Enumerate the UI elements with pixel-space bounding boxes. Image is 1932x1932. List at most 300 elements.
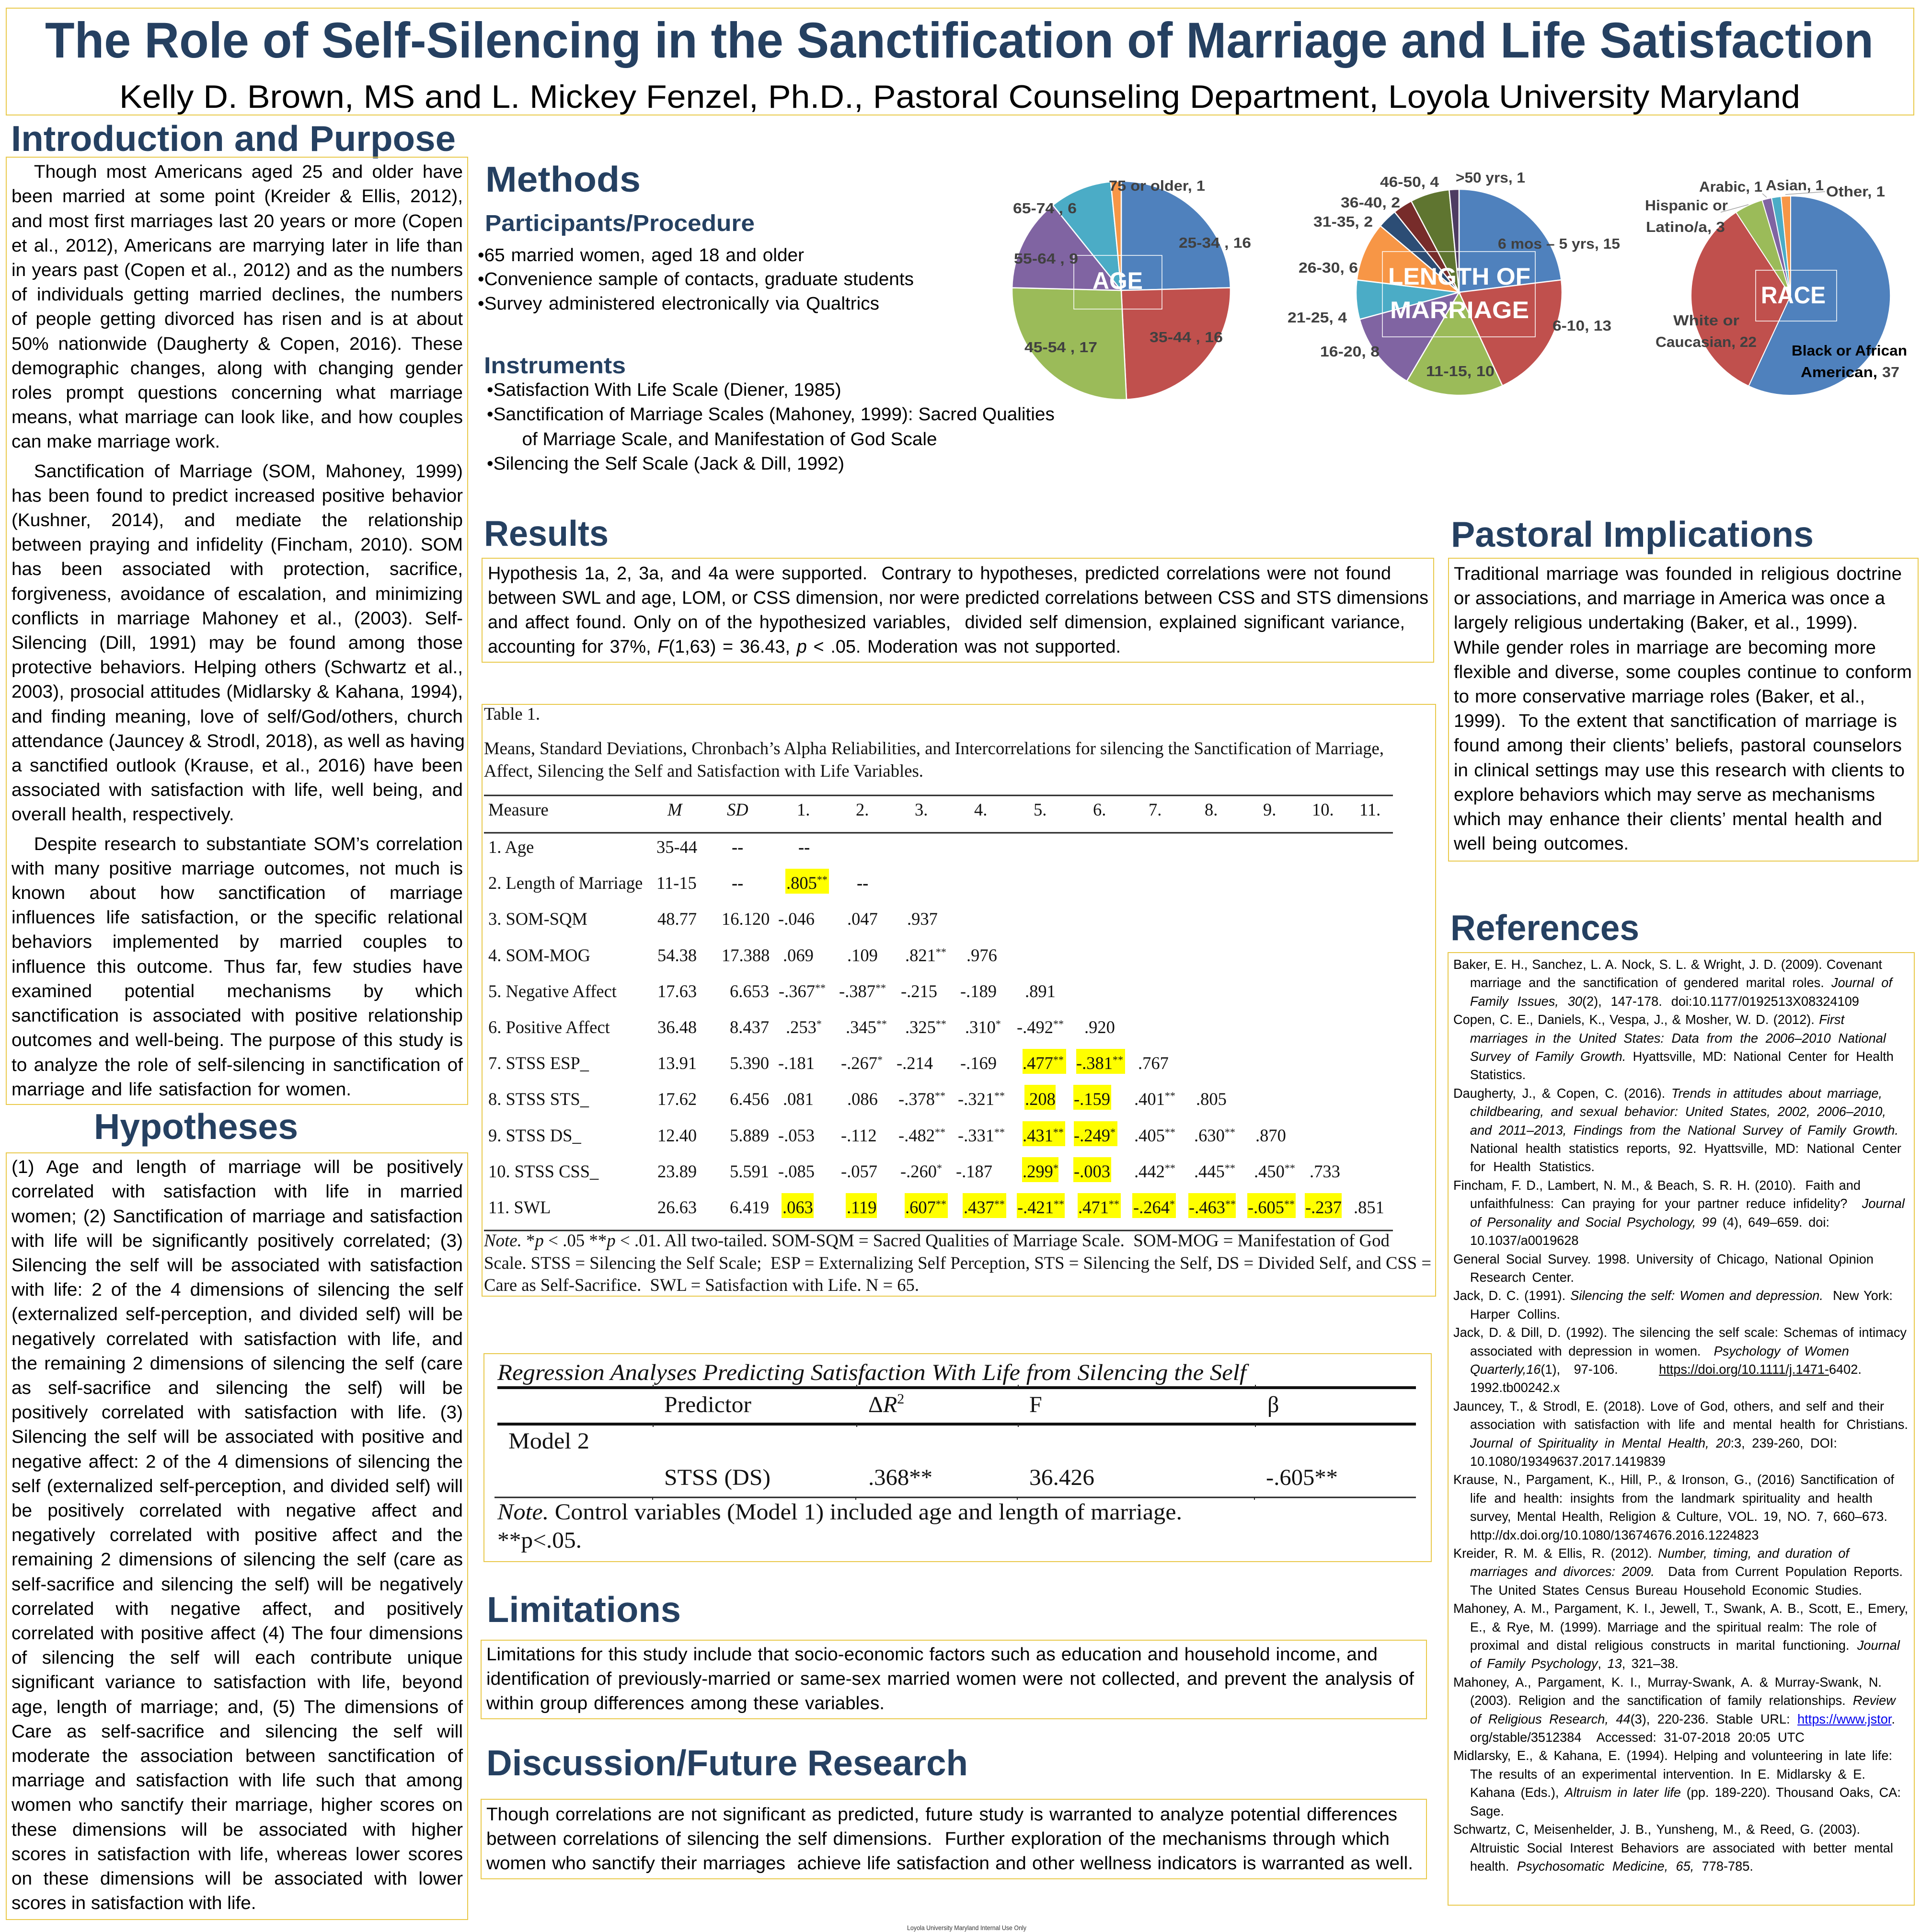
table header row: Measure [488, 800, 549, 819]
table header row: 6. [1093, 800, 1106, 819]
text block: pastoral implications: or associations, and marriage in America was once a [1454, 588, 1885, 609]
row 2: Length of Marriage: .805 [786, 873, 817, 893]
text block: references: Midlarsky, E., & Kahana, E. (1994). Helping and volunteering in late life: [1453, 1748, 1892, 1763]
row 6: Positive Affect: 8.437 [730, 1017, 769, 1037]
row 11: SWL: ** [1054, 1198, 1064, 1210]
text block: pastoral implications: Traditional marriage was founded in religious doctrine [1454, 564, 1902, 584]
regression table: STSS (DS) [664, 1465, 770, 1490]
text block: references: (2003). Religion and the sanctification of family relationships. Review [1470, 1693, 1896, 1708]
table note [483, 1230, 1431, 1295]
text block: results: between SWL and age, LOM, or CSS dimension, nor were predicted correlations between CSS and STS dimensions [488, 588, 1428, 608]
row 4: SOM-MOG: .069 [783, 945, 814, 965]
text block: references: health. Psychosomatic Medicine, 65, 778-785. [1470, 1859, 1753, 1874]
regression table [494, 1360, 1416, 1553]
row 1: Age: 1. Age [488, 837, 534, 857]
row 6: Positive Affect: .345 [846, 1017, 876, 1037]
authors and affiliation: Kelly D. Brown, MS and L. Mickey Fenzel, Ph.D., Pastoral Counseling Department, Loyola University Maryland [119, 79, 1800, 115]
pie chart: length of marriage: 6-10, 13 [1552, 317, 1611, 334]
text block: references: The results of an experimental intervention. In E. Midlarsky & E. [1470, 1767, 1865, 1782]
row 7: STSS ESP: -.181 [778, 1053, 815, 1073]
row 6: Positive Affect: ** [876, 1018, 887, 1030]
row 4: SOM-MOG: .109 [847, 945, 878, 965]
panel border: pastoral implications [1449, 558, 1918, 861]
row 11: SWL: .607 [905, 1197, 936, 1217]
text block: introduction: Sanctification of Marriage (SOM, Mahoney, 1999) [34, 461, 463, 482]
text block: references: association with satisfaction with life and mental health for Christians. [1470, 1417, 1908, 1432]
text block: introduction: Though most Americans aged 25 and older have [34, 162, 463, 182]
row 9: STSS DS: -.331 [958, 1126, 994, 1145]
table header row: 3. [915, 800, 928, 819]
text block: references: childbearing, and sexual behavior: United States, 2002, 2006–2010, [1470, 1104, 1886, 1119]
text block: references: of Religious Research, 44(3), 220-236. Stable URL: https://www.jstor. [1470, 1712, 1895, 1726]
text block: references: The United States Census Bureau Household Economic Studies. [1470, 1583, 1862, 1598]
pie chart: age: 45-54 , 17 [1024, 339, 1097, 356]
text block: references: National health statistics reports, 92. Hyattsville, MD: National Center [1470, 1141, 1901, 1156]
text block: hypotheses: age, length of marriage; and, (5) The dimensions of [12, 1697, 463, 1717]
pie chart: length of marriage: 21-25, 4 [1288, 309, 1347, 326]
text block: introduction: 50% nationwide (Daugherty & Copen, 2016). These [12, 334, 463, 354]
row 4: SOM-MOG: 54.38 [657, 945, 697, 965]
regression table: Model 2 [508, 1428, 589, 1454]
row 10: STSS CSS: -.085 [778, 1162, 815, 1181]
text block: references: 10.1037/a0019628 [1470, 1233, 1578, 1248]
text block: references: Mahoney, A. M., Pargament, K. I., Jewell, T., Swank, A. B., Scott, E., Emery, [1453, 1601, 1908, 1616]
text block: references: Sage. [1470, 1804, 1504, 1818]
text block: introduction: behaviors implemented by married couples to [12, 932, 463, 952]
text block: references: Survey of Family Growth. Hyattsville, MD: National Center for Health [1470, 1049, 1894, 1064]
row 10: STSS CSS: .445 [1194, 1162, 1225, 1181]
pie chart: race: Hispanic or [1645, 197, 1728, 214]
heading: Limitations: Limitations [487, 1589, 681, 1630]
row 10: STSS CSS: .733 [1310, 1162, 1340, 1181]
text block: introduction: forgiveness, avoidance of escalation, and minimizing [12, 584, 463, 604]
pie chart: age: 25-34 , 16 [1179, 234, 1251, 251]
pie chart: length of marriage: MARRIAGE [1390, 297, 1529, 323]
title: The Role of Self-Silencing in the Sanctification of Marriage and Life Satisfaction [45, 12, 1874, 69]
row 6: Positive Affect: 6. Positive Affect [488, 1017, 610, 1037]
pie chart: age: AGE [1092, 267, 1143, 294]
text block: introduction: and finding meaning, love of self/God/others, church [12, 707, 463, 727]
text block: references: Harper Collins. [1470, 1307, 1560, 1322]
text block: references: of Family Psychology, 13, 321–38. [1470, 1656, 1679, 1671]
row 9: STSS DS: 12.40 [657, 1126, 697, 1145]
text block: references: Jauncey, T., & Strodl, E. (2018). Love of God, others, and self and their [1453, 1399, 1884, 1414]
panel border: results [482, 558, 1434, 662]
text block: instruments bullets: •Sanctification of Marriage Scales (Mahoney, 1999): Sacred Qualities [487, 404, 1055, 425]
text block: introduction: overall health, respectively. [12, 805, 234, 825]
row 6: Positive Affect: * [816, 1018, 822, 1030]
row 11: SWL: 26.63 [657, 1197, 697, 1217]
row 9: STSS DS: -.249 [1074, 1126, 1110, 1145]
text block: hypotheses: with life will be significantly positively correlated; (3) [12, 1231, 463, 1251]
text block: instruments bullets [487, 378, 1053, 476]
text block: introduction: 2003), prosocial attitudes (Midlarsky & Kahana, 1994), [12, 682, 463, 702]
subheading: Instruments: Instruments [484, 353, 626, 379]
row 5: Negative Affect: ** [815, 982, 826, 994]
row 8: STSS STS: -.159 [1074, 1089, 1110, 1109]
row 2: Length of Marriage: 2. Length of Marriage [488, 873, 643, 893]
text block: introduction: with many positive marriage outcomes, not much is [12, 859, 463, 879]
row 4: SOM-MOG: 4. SOM-MOG [488, 945, 590, 965]
row 8: STSS STS: 8. STSS STS_ [488, 1089, 589, 1109]
panel border: discussion [481, 1799, 1426, 1879]
pie chart: race: American, [1801, 364, 1877, 380]
row 6: Positive Affect: ** [936, 1018, 946, 1030]
row 4: SOM-MOG: 17.388 [722, 945, 770, 965]
text block: introduction: to analyze the role of self-silencing in sanctification of [12, 1055, 463, 1075]
text block: introduction: Despite research to substantiate SOM’s correlation [34, 834, 463, 854]
pie chart: length of marriage: LENGTH OF [1388, 263, 1530, 290]
table header row: 7. [1149, 800, 1162, 819]
table header row: 4. [974, 800, 987, 819]
row 8: STSS STS: .086 [847, 1089, 878, 1109]
table note: Note. *p < .05 **p < .01. All two-tailed. SOM-SQM = Sacred Qualities of Marriage Scale. SOM-MOG = Manifestation of God [483, 1230, 1390, 1250]
pie chart: race [1645, 177, 1907, 395]
row 7: STSS ESP: 5.390 [730, 1053, 769, 1073]
text block: introduction: in years past (Copen et al., 2012) and as the numbers [12, 260, 463, 280]
table header row: 8. [1205, 800, 1218, 819]
row 5: Negative Affect: ** [875, 982, 886, 994]
row 7: STSS ESP: ** [1053, 1054, 1064, 1066]
correlation table: Affect, Silencing the Self and Satisfaction with Life Variables. [484, 761, 923, 781]
row 7: STSS ESP: .767 [1138, 1053, 1169, 1073]
text block: references: for Health Statistics. [1470, 1159, 1595, 1174]
text block: hypotheses: remaining 2 dimensions of silencing the self (care as [12, 1550, 463, 1570]
text block: hypotheses [12, 1155, 463, 1916]
row 3: SOM-SQM: -.046 [778, 909, 815, 929]
row 11: SWL: -.264 [1133, 1197, 1170, 1217]
text block: instruments bullets: •Satisfaction With Life Scale (Diener, 1985) [487, 380, 841, 400]
text block: hypotheses: these dimensions will be associated with higher [12, 1820, 463, 1840]
row 4: SOM-MOG: .821 [905, 945, 936, 965]
pie chart: age: 55-64 , 9 [1014, 250, 1078, 267]
regression table: 2 [897, 1391, 904, 1407]
row 8: STSS STS: .081 [783, 1089, 814, 1109]
text block: pastoral implications: to more conservative marriage roles (Baker, et al., [1454, 687, 1865, 707]
text block: references: Daugherty, J., & Copen, C. (2016). Trends in attitudes about marriage, [1453, 1086, 1882, 1101]
row 10: STSS CSS: -.260 [900, 1162, 937, 1181]
text block: introduction: sanctification is associated with positive relationship [12, 1006, 463, 1026]
row 10: STSS CSS: ** [1225, 1162, 1235, 1174]
text block: discussion: between correlations of silencing the self dimensions. Further exploration of the mechanisms through which [486, 1829, 1390, 1849]
text block: hypotheses: on these dimensions will be associated with lower [12, 1869, 463, 1889]
text block: references: marriage and the sanctification of gendered marital roles. Journal of [1470, 975, 1892, 990]
text block: references: Journal of Spirituality in Mental Health, 20:3, 239-260, DOI: [1470, 1436, 1837, 1450]
row 10: STSS CSS: .299 [1023, 1162, 1053, 1181]
row 1: Age: -- [798, 837, 810, 857]
row 5: Negative Affect: 6.653 [730, 981, 769, 1001]
row 7: STSS ESP: .477 [1023, 1053, 1053, 1073]
title panel border [6, 8, 1914, 115]
text block: references: Quarterly,16(1), 97-106. https://doi.org/10.1111/j.1471-6402. [1470, 1362, 1862, 1377]
text block: introduction: between praying and infidelity (Fincham, 2010). SOM [12, 535, 463, 555]
row 11: SWL: 11. SWL [488, 1197, 551, 1217]
table note: Scale. STSS = Silencing the Self Scale; ESP = Externalizing Self Perception, STS = Silencing the Self, DS = Divided Self, and CSS = [484, 1253, 1431, 1273]
pie chart: race: Latino/a, 3 [1646, 218, 1725, 235]
row 11: SWL: .851 [1354, 1197, 1384, 1217]
text block: introduction: has been found to predict increased positive behavior [12, 486, 463, 506]
text block: hypotheses: women; (2) Sanctification of marriage and satisfaction [12, 1207, 463, 1227]
row 7: STSS ESP: * [877, 1054, 883, 1066]
row 10: STSS CSS: .450 [1254, 1162, 1285, 1181]
row 2: Length of Marriage: -- [732, 873, 743, 893]
row 11: SWL: -.605 [1248, 1197, 1284, 1217]
row 3: SOM-SQM: 16.120 [722, 909, 770, 929]
row 5: Negative Affect [488, 981, 1056, 1001]
text block: introduction: known about how sanctification of marriage [12, 883, 463, 903]
pie chart: race: Other, 1 [1826, 183, 1885, 200]
text block: references: Fincham, F. D., Lambert, N. M., & Beach, S. R. H. (2010). Faith and [1453, 1178, 1861, 1193]
row 3: SOM-SQM: 48.77 [657, 909, 697, 929]
text block: results: and affect found. Only on of the hypothesized variables, divided self dimension, explained significant variance, [488, 612, 1405, 632]
row 9: STSS DS: .431 [1023, 1126, 1053, 1145]
pie chart: length of marriage [1288, 169, 1620, 395]
text block: limitations: identification of previously-married or same-sex married women were not collected, and prevent the analysis of [486, 1669, 1414, 1689]
correlation table [483, 704, 1431, 1295]
panel border: introduction [6, 157, 468, 1104]
text block: references: Jack, D. C. (1991). Silencing the self: Women and depression. New York: [1453, 1288, 1893, 1303]
row 9: STSS DS: ** [1053, 1126, 1064, 1138]
row 11: SWL: ** [1284, 1198, 1295, 1210]
text block: introduction: conflicts in marriage Mahoney et al., (2003). Self- [12, 609, 463, 629]
text block: references: Schwartz, C, Meisenhelder, J. B., Yunsheng, M., & Reed, G. (2003). [1453, 1822, 1860, 1837]
text block: pastoral implications: found among their clients’ beliefs, pastoral counselors [1454, 736, 1902, 756]
row 11: SWL: 6.419 [730, 1197, 769, 1217]
regression table: .368** [868, 1465, 932, 1490]
row 6: Positive Affect: -.492 [1017, 1017, 1053, 1037]
row 10: STSS CSS: 10. STSS CSS_ [488, 1162, 599, 1181]
row 10: STSS CSS: -.003 [1074, 1162, 1110, 1181]
row 11: SWL: .119 [847, 1197, 877, 1217]
text block: hypotheses: moderate the association between sanctification of [12, 1746, 463, 1766]
row 9: STSS DS: -.482 [898, 1126, 935, 1145]
row 2: Length of Marriage [488, 873, 868, 893]
row 8: STSS STS: ** [935, 1090, 945, 1102]
row 9: STSS DS: * [1110, 1126, 1116, 1138]
text block: references: Altruistic Social Interest Behaviors are associated with better mental [1470, 1840, 1893, 1855]
row 2: Length of Marriage: -- [857, 873, 868, 893]
text block: introduction: Silencing (Dill, 1991) may be found among those [12, 633, 463, 653]
row 4: SOM-MOG: .976 [966, 945, 997, 965]
row 8: STSS STS: 6.456 [730, 1089, 769, 1109]
text block: hypotheses: the remaining 2 dimensions of silencing the self (care [12, 1354, 463, 1374]
row 7: STSS ESP: -.267 [841, 1053, 877, 1073]
text block: results: accounting for 37%, F(1,63) = 36.43, p < .05. Moderation was not supported. [488, 637, 1121, 657]
text block: references: survey, Mental Health, Religion & Culture, VOL. 19, NO. 7, 660–673. [1470, 1509, 1887, 1524]
row 10: STSS CSS [488, 1162, 1340, 1181]
text block: hypotheses: women who sanctify their marriage, higher scores on [12, 1795, 463, 1815]
table header row: 2. [856, 800, 869, 819]
regression table: ΔR [868, 1392, 897, 1417]
table header row: 5. [1034, 800, 1046, 819]
text block: introduction: examined potential mechanisms by which [12, 981, 463, 1001]
row 8: STSS STS [488, 1089, 1227, 1109]
text block: introduction: associated with satisfaction with life, well being, and [12, 780, 463, 800]
row 10: STSS CSS: * [1053, 1162, 1058, 1174]
panel border: regression table [484, 1354, 1431, 1562]
text block: introduction: outcomes and well-being. The purpose of this study is [12, 1030, 463, 1050]
row 11: SWL: -.421 [1017, 1197, 1054, 1217]
text block: hypotheses: correlated with negative affect, and positively [12, 1599, 463, 1619]
table header row: 11. [1359, 800, 1380, 819]
text block: pastoral implications: largely religious undertaking (Baker, et al., 1999). [1454, 613, 1858, 633]
text block: introduction: influences life satisfaction, or the specific relational [12, 908, 463, 928]
row 10: STSS CSS: 23.89 [657, 1162, 697, 1181]
text block: pastoral implications: in clinical settings may use this research with clients to [1454, 760, 1905, 781]
row 5: Negative Affect: -.387 [839, 981, 875, 1001]
row 11: SWL: * [1170, 1198, 1175, 1210]
row 8: STSS STS: 17.62 [657, 1089, 697, 1109]
text block: hypotheses: self (externalized self-perception, and divided self) will [12, 1476, 463, 1496]
row 11: SWL: ** [994, 1198, 1005, 1210]
text block: hypotheses: as self-sacrifice and silencing the self) will be [12, 1378, 463, 1398]
pie chart: race: RACE [1761, 282, 1826, 309]
pie chart: length of marriage: >50 yrs, 1 [1456, 169, 1525, 186]
text block: introduction: attendance (Jauncey & Strodl, 2018), as well as having [12, 731, 465, 751]
text block: introduction: been married at some point (Kreider & Ellis, 2012), [12, 186, 463, 207]
text block: references: E., & Rye, M. (1999). Marriage and the spiritual realm: The role of [1470, 1620, 1876, 1634]
row 10: STSS CSS: * [937, 1162, 942, 1174]
footer note: Loyola University Maryland Internal Use Only [907, 1924, 1026, 1932]
correlation table: Table 1. [484, 704, 540, 724]
subheading: Participants/Procedure: Participants/Procedure [485, 211, 755, 236]
heading: Results: Results [484, 513, 609, 553]
row 7: STSS ESP: ** [1113, 1054, 1123, 1066]
text block: references: unfaithfulness: Can praying for your partner reduce infidelity? Journal [1470, 1196, 1905, 1211]
panel border: hypotheses [6, 1153, 468, 1920]
table header row [488, 800, 1380, 819]
text block: references: Copen, C. E., Daniels, K., Vespa, J., & Mosher, W. D. (2012). First [1453, 1012, 1844, 1027]
heading: Discussion/Future Research: Discussion/Future Research [486, 1743, 968, 1783]
row 9: STSS DS: .630 [1194, 1126, 1225, 1145]
text block: hypotheses: Silencing the self will be associated with positive and [12, 1427, 463, 1447]
pie chart: race: Black or African [1792, 342, 1907, 359]
row 11: SWL: -.237 [1305, 1197, 1342, 1217]
regression table: Note. Control variables (Model 1) included age and length of marriage. [497, 1499, 1182, 1525]
row 1: Age [488, 837, 810, 857]
text block: hypotheses: scores in satisfaction with life, whereas lower scores [12, 1844, 463, 1864]
row 9: STSS DS [488, 1126, 1286, 1145]
row 8: STSS STS: -.378 [898, 1089, 935, 1109]
row 8: STSS STS: .208 [1025, 1089, 1056, 1109]
row 9: STSS DS: -.053 [778, 1126, 815, 1145]
heading: References: References [1450, 908, 1639, 948]
row 3: SOM-SQM: .937 [907, 909, 938, 929]
row 10: STSS CSS: 5.591 [730, 1162, 769, 1181]
row 11: SWL: ** [1109, 1198, 1119, 1210]
text block: instruments bullets: •Silencing the Self Scale (Jack & Dill, 1992) [487, 454, 844, 474]
row 9: STSS DS: 5.889 [730, 1126, 769, 1145]
pie chart: length of marriage: 46-50, 4 [1380, 173, 1439, 190]
text block: pastoral implications: explore behaviors which may serve as mechanisms [1454, 785, 1875, 805]
pie chart: length of marriage: 26-30, 6 [1299, 259, 1358, 276]
row 10: STSS CSS: ** [1165, 1162, 1175, 1174]
text block: hypotheses: self-sacrifice and silencing the self) will be negatively [12, 1575, 463, 1595]
text block: introduction: and most first marriages last 20 years or more (Copen [12, 211, 463, 231]
row 3: SOM-SQM: .047 [847, 909, 878, 929]
row 7: STSS ESP: -.169 [960, 1053, 997, 1073]
row 9: STSS DS: .870 [1255, 1126, 1286, 1145]
text block: results: Hypothesis 1a, 2, 3a, and 4a were supported. Contrary to hypotheses, predicted correlations were not found [488, 564, 1391, 584]
row 10: STSS CSS: -.187 [956, 1162, 992, 1181]
row 6: Positive Affect: ** [1053, 1018, 1064, 1030]
text block: references: Jack, D. & Dill, D. (1992). The silencing the self scale: Schemas of intimacy [1453, 1325, 1907, 1340]
table header row: 1. [797, 800, 810, 819]
pie chart: length of marriage: 6 mos – 5 yrs, 15 [1498, 235, 1620, 252]
row 11: SWL: -.463 [1189, 1197, 1225, 1217]
text block: introduction: marriage and life satisfaction for women. [12, 1080, 351, 1100]
row 8: STSS STS: ** [1165, 1090, 1175, 1102]
row 6: Positive Affect [488, 1017, 1115, 1037]
text block: pastoral implications [1454, 562, 1912, 856]
pie chart: age: 75 or older, 1 [1109, 177, 1205, 194]
row 6: Positive Affect: .920 [1084, 1017, 1115, 1037]
text block: references: life and health: insights from the landmark spirituality and health [1470, 1491, 1873, 1506]
text block: hypotheses: (externalized self-perception, and divided self) will be [12, 1304, 463, 1324]
row 10: STSS CSS: -.057 [841, 1162, 877, 1181]
row 1: Age: 35-44 [656, 837, 697, 857]
regression table: Predictor [664, 1392, 751, 1417]
text block: references: marriages in the United States: Data from the 2006–2010 National [1470, 1031, 1886, 1046]
row 1: Age: -- [732, 837, 743, 857]
text block: limitations [486, 1643, 1414, 1716]
text block: introduction: can make marriage work. [12, 432, 220, 452]
text block: pastoral implications: 1999). To the extent that sanctification of marriage is [1454, 711, 1897, 731]
text block: hypotheses: Care as self-sacrifice and silencing the self will [12, 1722, 463, 1742]
row 9: STSS DS: ** [1225, 1126, 1235, 1138]
row 3: SOM-SQM: 3. SOM-SQM [488, 909, 587, 929]
text block: hypotheses: Silencing the self will be associated with satisfaction [12, 1255, 463, 1276]
text block: hypotheses: of silencing the self will each contribute unique [12, 1648, 463, 1668]
text block: references: org/stable/3512384 Accessed: 31-07-2018 20:05 UTC [1470, 1730, 1805, 1745]
text block: participants and procedure bullets [478, 243, 914, 316]
table note: Care as Self-Sacrifice. SWL = Satisfaction with Life. N = 65. [484, 1275, 919, 1295]
text block: pastoral implications: which may enhance their clients’ mental health and [1454, 809, 1882, 829]
pie chart: length of marriage: 11-15, 10 [1426, 363, 1495, 380]
pie chart: length of marriage: 16-20, 8 [1320, 343, 1380, 360]
row 9: STSS DS: 9. STSS DS_ [488, 1126, 581, 1145]
text block: hypotheses: with life: 2 of the 4 dimensions of silencing the self [12, 1280, 463, 1300]
text block: discussion: Though correlations are not significant as predicted, future study is warranted to analyze potential differences [486, 1805, 1397, 1825]
row 5: Negative Affect: -.215 [901, 981, 937, 1001]
heading: Hypotheses: Hypotheses [94, 1106, 298, 1147]
row 5: Negative Affect: .891 [1025, 981, 1056, 1001]
text block: introduction: roles prompt questions concerning what marriage [12, 383, 463, 403]
text block: instruments bullets: of Marriage Scale, and Manifestation of God Scale [522, 429, 937, 449]
text block: introduction: of individuals getting married declines, the numbers [12, 285, 463, 305]
table header row: 9. [1263, 800, 1276, 819]
text block: references: General Social Survey. 1998. University of Chicago, National Opinion [1453, 1252, 1874, 1266]
row 9: STSS DS: .405 [1134, 1126, 1165, 1145]
text block: participants and procedure bullets: •Survey administered electronically via Qualtrics [478, 294, 879, 314]
pie chart: age: 65-74 , 6 [1013, 200, 1077, 217]
panel border: correlation table [482, 704, 1436, 1296]
text block: references: Family Issues, 30(2), 147-178. doi:10.1177/0192513X08324109 [1470, 994, 1859, 1009]
text block: hypotheses: positively correlated with satisfaction with life. (3) [12, 1403, 463, 1423]
row 3: SOM-SQM [488, 909, 938, 929]
text block: introduction: a sanctified outlook (Krause, et al., 2016) have been [12, 756, 463, 776]
row 11: SWL: .063 [782, 1197, 813, 1217]
text block: pastoral implications: While gender roles in marriage are becoming more [1454, 638, 1876, 658]
text block: pastoral implications: flexible and diverse, some couples continue to conform [1454, 662, 1912, 682]
row 6: Positive Affect: * [996, 1018, 1001, 1030]
row 5: Negative Affect: 17.63 [657, 981, 697, 1001]
row 8: STSS STS: .401 [1134, 1089, 1165, 1109]
panel border: references [1448, 953, 1914, 1905]
row 6: Positive Affect: .253 [786, 1017, 816, 1037]
row 9: STSS DS: ** [1165, 1126, 1175, 1138]
regression table: Regression Analyses Predicting Satisfaction With Life from Silencing the Self [497, 1360, 1249, 1385]
